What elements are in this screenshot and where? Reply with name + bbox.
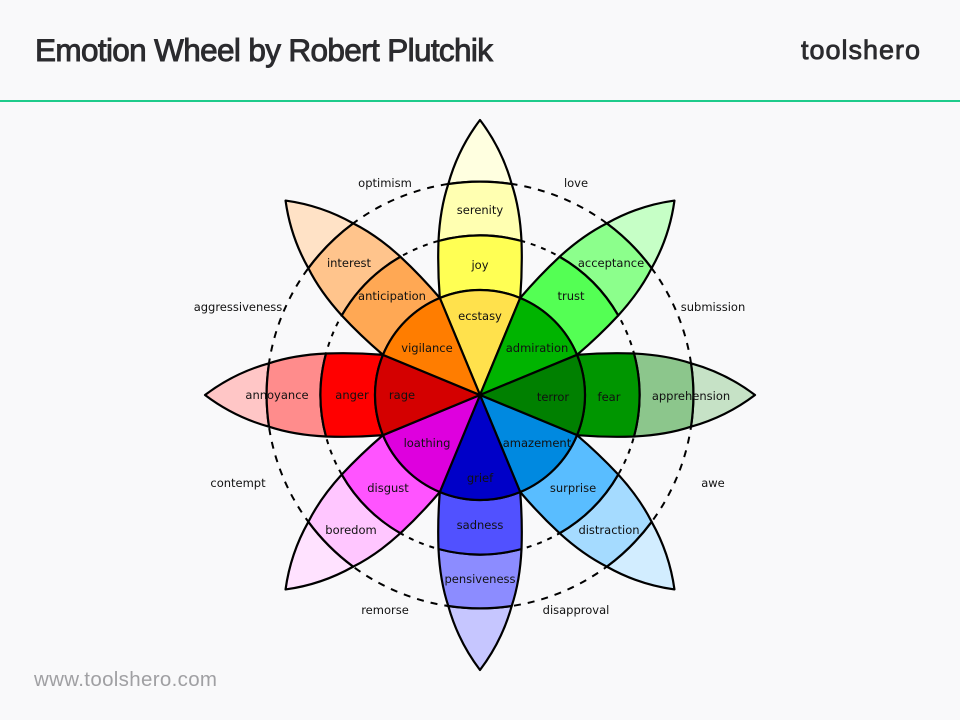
dashed inner circle xyxy=(320,236,640,554)
dyad labels: contempt xyxy=(210,476,266,490)
header divider xyxy=(0,100,960,102)
dyad labels: love xyxy=(564,176,588,190)
petal: disgust: boredom xyxy=(325,523,377,537)
petal: trust xyxy=(450,171,704,425)
petal: disgust: loathing xyxy=(404,436,450,450)
petal: anticipation: vigilance xyxy=(401,341,453,355)
petal: surprise xyxy=(450,365,704,619)
dashed outer circle xyxy=(267,182,693,608)
petal: joy: joy xyxy=(470,258,489,272)
dyad labels: awe xyxy=(701,476,725,490)
petal: anger: anger xyxy=(335,388,369,402)
petal: disgust xyxy=(256,365,510,619)
petal: anger: rage xyxy=(389,388,415,402)
petal: fear: apprehension xyxy=(652,389,730,403)
petal: joy: serenity xyxy=(457,203,503,217)
petal: surprise: surprise xyxy=(550,481,596,495)
petal: joy: ecstasy xyxy=(458,309,502,323)
petal: trust: admiration xyxy=(506,341,568,355)
dyad labels: remorse xyxy=(361,603,409,617)
petal: anger: annoyance xyxy=(245,388,309,402)
petal: trust: acceptance xyxy=(578,256,644,270)
petal: fear: fear xyxy=(598,390,621,404)
petal: anticipation: anticipation xyxy=(358,289,426,303)
dyad labels: disapproval xyxy=(543,603,609,617)
petal: sadness: sadness xyxy=(457,518,503,532)
petal: fear: terror xyxy=(537,390,569,404)
petal: joy xyxy=(438,120,522,395)
dyad labels xyxy=(194,176,745,617)
petal: anger xyxy=(205,353,480,437)
petal: sadness: pensiveness xyxy=(444,572,516,586)
dyad labels: aggressiveness xyxy=(194,300,282,314)
petal: anticipation: interest xyxy=(327,256,372,270)
petal: sadness xyxy=(438,395,522,670)
petal: sadness: grief xyxy=(467,471,494,485)
website url: www.toolshero.com xyxy=(33,668,217,691)
petal: fear xyxy=(480,353,755,437)
petal: anticipation xyxy=(256,171,510,425)
logo: toolshero: toolshero xyxy=(801,35,920,65)
dyad labels: submission xyxy=(681,300,745,314)
petal: disgust: disgust xyxy=(367,481,409,495)
title: Emotion Wheel by Robert Plutchik xyxy=(35,32,493,68)
dyad labels: optimism xyxy=(358,176,412,190)
petal: surprise: amazement xyxy=(503,436,572,450)
petal: surprise: distraction xyxy=(578,523,640,537)
petal: trust: trust xyxy=(557,289,585,303)
